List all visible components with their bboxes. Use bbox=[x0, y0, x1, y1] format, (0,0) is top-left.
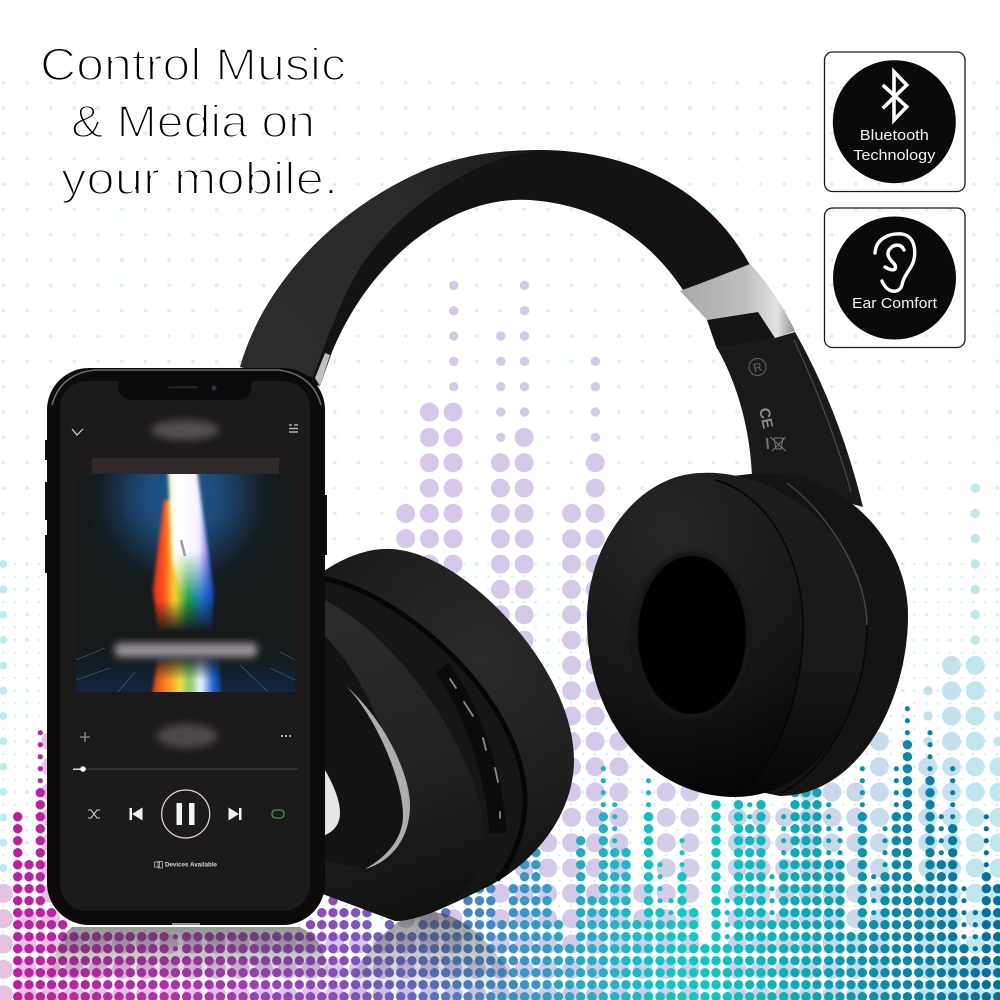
shell ring bbox=[320, 578, 525, 921]
title: & Media on bbox=[71, 96, 315, 147]
left silver slider bbox=[315, 353, 330, 386]
queue icon bbox=[289, 425, 298, 432]
progress bar bbox=[73, 766, 298, 772]
ear pad bbox=[320, 549, 574, 921]
notch bbox=[118, 378, 252, 400]
lower rainbow bbox=[152, 655, 222, 696]
left earcup bbox=[320, 549, 574, 921]
headband matte top surface bbox=[240, 152, 530, 377]
repeat icon bbox=[272, 810, 284, 818]
icon: bluetooth bbox=[883, 72, 907, 120]
reflection of phone and headphones bbox=[50, 912, 525, 1000]
badge: ear comfort bbox=[824, 208, 965, 348]
registered mark: R bbox=[752, 360, 764, 375]
icon: ear bbox=[875, 234, 915, 291]
title: your mobile. bbox=[61, 153, 338, 204]
side buttons bbox=[45, 440, 327, 573]
blurred title bbox=[151, 420, 219, 440]
headphones bbox=[240, 150, 908, 921]
slider rail opening bbox=[707, 312, 775, 349]
headband inner black underside bbox=[240, 150, 750, 386]
lower arm bbox=[717, 332, 863, 507]
title bbox=[40, 39, 346, 204]
badge: ear comfort: Ear Comfort bbox=[852, 295, 938, 312]
recycling mark bbox=[767, 437, 786, 451]
CE mark: CE bbox=[755, 406, 776, 430]
badge: bluetooth technology bbox=[824, 52, 965, 192]
equalizer back layer: pale lavender dots bbox=[3, 284, 999, 995]
right earcup bbox=[587, 473, 908, 797]
control buttons bbox=[442, 668, 500, 833]
pause button bbox=[162, 790, 210, 838]
plus icon bbox=[80, 732, 90, 742]
shell groove bbox=[320, 578, 525, 880]
ear pad bbox=[587, 473, 803, 797]
badge: bluetooth technology: Technology bbox=[853, 147, 936, 164]
registered mark bbox=[749, 358, 766, 376]
chevron icon bbox=[72, 429, 83, 435]
shuffle icon bbox=[88, 810, 100, 818]
devices available: Devices Available bbox=[165, 862, 217, 868]
figure bbox=[181, 540, 185, 556]
blurred song text bbox=[115, 643, 257, 657]
shell seam bbox=[780, 625, 867, 793]
album banner bbox=[92, 458, 279, 474]
inner rim bbox=[632, 552, 750, 720]
white beam bbox=[168, 470, 212, 605]
screen bbox=[60, 381, 310, 911]
speaker and camera bbox=[168, 386, 216, 390]
rainbow beam bbox=[153, 500, 214, 632]
grey stitching seam bbox=[787, 483, 867, 625]
arm highlight bbox=[794, 340, 851, 492]
next icon bbox=[228, 808, 242, 820]
album art bbox=[76, 474, 295, 692]
ear opening bbox=[638, 556, 746, 714]
silver crescent bbox=[346, 686, 410, 869]
blue glow bbox=[120, 430, 244, 560]
floor glow bbox=[76, 659, 295, 692]
silver slider bbox=[680, 264, 795, 338]
pad side ring bbox=[700, 473, 868, 797]
smartphone bbox=[45, 368, 327, 925]
hinge recess bbox=[320, 632, 403, 868]
charging port highlight bbox=[172, 923, 200, 925]
previous icon bbox=[130, 808, 142, 820]
white gap under the arm bbox=[320, 762, 340, 837]
badge: bluetooth technology: Bluetooth bbox=[860, 127, 929, 144]
equalizer foreground layer: saturated gradient dots bbox=[18, 707, 998, 997]
more dots bbox=[281, 735, 291, 737]
phone body bbox=[47, 368, 325, 925]
outer shell bbox=[700, 473, 908, 796]
headband bbox=[240, 150, 750, 386]
title: Control Music bbox=[40, 39, 346, 90]
textured face bbox=[320, 598, 484, 920]
top edge highlight bbox=[52, 370, 321, 405]
floor lines bbox=[76, 648, 295, 692]
pad seam bbox=[715, 480, 803, 797]
blurred track title bbox=[157, 724, 217, 748]
